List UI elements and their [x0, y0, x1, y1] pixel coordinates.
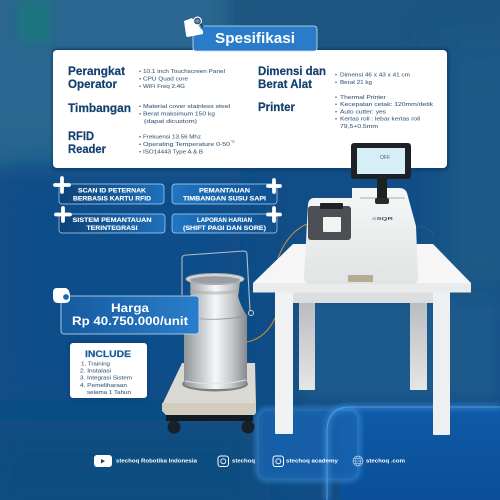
feature: pemantauan timbangan susu sapi: [172, 180, 280, 204]
spec: printer: •: [335, 116, 337, 122]
spec: printer: •: [335, 102, 337, 108]
spec: rfid reader: Frekuensi 13.56 Mhz: [143, 134, 201, 140]
spec: timbangan: Material cover stainless steel: [143, 104, 230, 110]
include box: 3. Integrasi Sistem: [80, 376, 132, 382]
feature: pemantauan timbangan susu sapi: PEMANTAUAN: [199, 188, 250, 194]
spec: perangkat operator: Operator: [68, 77, 117, 91]
feature: sistem pemantauan terintegrasi: SISTEM PEMANTAUAN: [72, 217, 152, 224]
feature: pemantauan timbangan susu sapi: TIMBANGAN SUSU SAPI: [183, 196, 266, 202]
spec: perangkat operator: •: [139, 76, 141, 82]
spec: printer: •: [335, 95, 337, 101]
printer tray: [308, 206, 351, 240]
spec: dimensi dan berat alat: •: [335, 72, 337, 78]
social: website: stechoq .com: [366, 458, 405, 464]
include box: INCLUDE: [85, 349, 131, 359]
tablet screen: [357, 148, 405, 174]
spec: rfid reader: ISO14443 Type A & B: [143, 150, 203, 156]
social: youtube: stechoq Robotika Indonesia: [116, 458, 198, 464]
feature: sistem pemantauan terintegrasi: TERINTEGRASI: [86, 225, 138, 232]
social: instagram stechoq: stechoq: [232, 458, 255, 464]
spec: printer: Kertas roll : lebar kertas roll: [340, 116, 420, 122]
social: youtube: [94, 455, 198, 467]
price banner: Rp 40.750.000/unit: [72, 314, 188, 328]
spec: perangkat operator: [68, 64, 225, 91]
spec: dimensi dan berat alat: Berat 21 kg: [340, 80, 372, 86]
spec: rfid reader: [68, 129, 235, 156]
spec: dimensi dan berat alat: Berat Alat: [258, 77, 312, 91]
include box: 4. Pemeliharaan: [80, 383, 127, 389]
weighing scale: [162, 363, 256, 434]
spec: printer: Printer: [258, 100, 295, 114]
device: weighing terminal: [304, 143, 434, 284]
spec: rfid reader: °C: [231, 140, 235, 144]
spec: timbangan: Berat maksimum 150 kg: [143, 112, 215, 118]
device: weighing terminal: OFF: [380, 155, 390, 161]
tablet frame: [351, 143, 411, 179]
cables at right of device: [417, 227, 434, 236]
spec: dimensi dan berat alat: •: [335, 80, 337, 86]
spec: printer: [258, 95, 433, 130]
include box: 2. Instalasi: [80, 368, 111, 374]
spec: printer: Kecepatan cetak: 120mm/detik: [340, 102, 433, 108]
spec: printer: •: [335, 110, 337, 116]
device body: [304, 188, 418, 284]
feature: scan id peternak: BERBASIS KARTU RFID: [73, 196, 151, 202]
social: instagram stechoq academy: [273, 456, 339, 466]
spec: perangkat operator: WiFi Freq 2.4G: [143, 84, 186, 90]
spec: printer: Auto cutter: yes: [340, 110, 386, 116]
brand logo: ≡SQR: [372, 216, 394, 221]
spec: rfid reader: •: [139, 142, 141, 148]
feature: scan id peternak: [55, 178, 164, 204]
spec: timbangan: •: [139, 104, 141, 110]
spec: dimensi dan berat alat: Dimensi 46 x 43 x 41 cm: [340, 72, 410, 78]
feature: sistem pemantauan terintegrasi: [56, 208, 165, 233]
spec: rfid reader: •: [139, 134, 141, 140]
spec: rfid reader: RFID: [68, 129, 94, 143]
orange cable: [247, 224, 307, 342]
table: [253, 244, 471, 435]
icon: document with magnifier: [184, 16, 203, 37]
spec: dimensi dan berat alat: Dimensi dan: [258, 64, 326, 78]
spec: rfid reader: Operating Temperature 0-50: [143, 142, 230, 148]
spec: printer: Thermal Printer: [340, 95, 386, 101]
spec: rfid reader: •: [139, 150, 141, 156]
spec: timbangan: •: [139, 112, 141, 118]
feature: laporan harian: [172, 208, 280, 233]
glowing rounded outlines: [258, 407, 500, 500]
price banner: [61, 296, 199, 334]
title banner: Spesifikasi: [215, 30, 295, 47]
include box: selama 1 Tahun: [87, 390, 131, 396]
include box: [68, 341, 149, 400]
social: website: [353, 456, 405, 466]
spec: dimensi dan berat alat: [258, 64, 410, 91]
printer paper: [323, 217, 341, 232]
include box: 1. Training: [81, 362, 110, 368]
title banner: [193, 26, 317, 51]
spec: timbangan: (dapat dicustom): [144, 119, 197, 125]
spec: perangkat operator: 10.1 inch Touchscreen Panel: [143, 69, 225, 75]
social: instagram stechoq: [218, 456, 255, 466]
social: instagram stechoq academy: stechoq academy: [286, 458, 339, 464]
spec: perangkat operator: CPU Quad core: [143, 76, 188, 82]
spec: perangkat operator: •: [139, 84, 141, 90]
feature: laporan harian: (SHIFT PAGI DAN SORE): [183, 225, 266, 232]
feature: scan id peternak: SCAN ID PETERNAK: [78, 188, 146, 194]
spec: timbangan: Timbangan: [68, 101, 131, 115]
spec: perangkat operator: •: [139, 69, 141, 75]
price banner: Harga: [111, 301, 149, 315]
feature: laporan harian: LAPORAN HARIAN: [197, 217, 252, 224]
spec: printer: 79,5+0.5mm: [340, 124, 378, 130]
tablet stand: [377, 178, 387, 198]
spec: timbangan: [68, 101, 230, 125]
icon: money: [53, 288, 70, 303]
handle notch: [348, 275, 373, 282]
white specification panel: [52, 48, 449, 171]
milk can: [182, 251, 254, 392]
spec: perangkat operator: Perangkat: [68, 64, 125, 78]
spec: rfid reader: Reader: [68, 142, 106, 156]
